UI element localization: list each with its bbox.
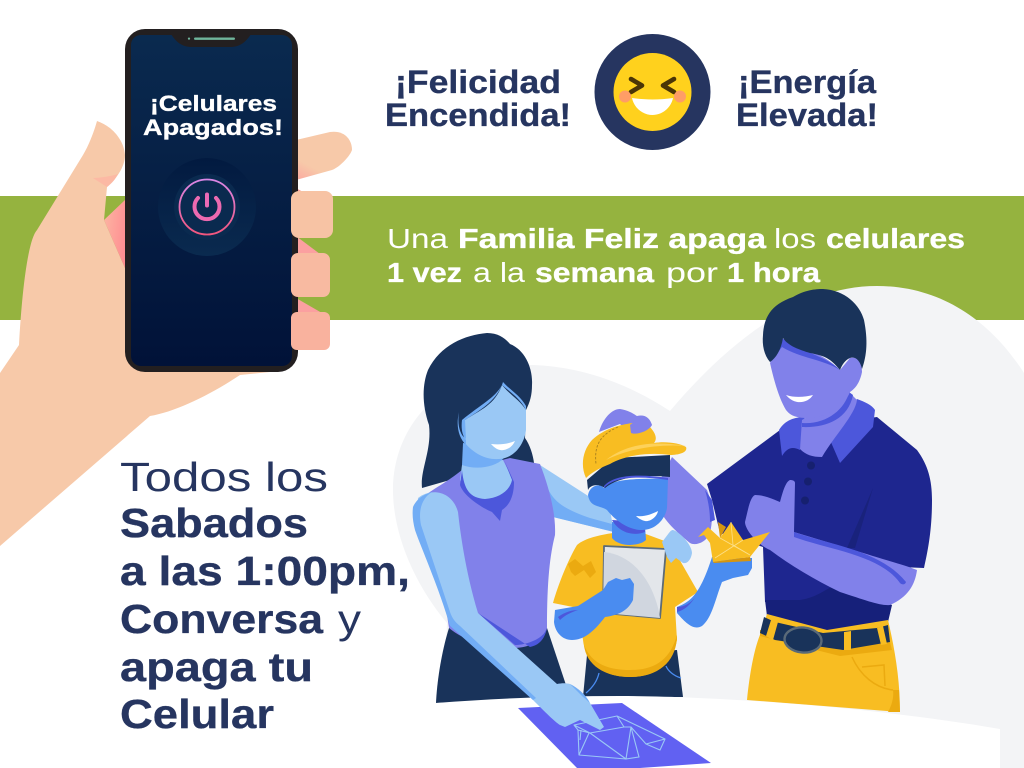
face edge [604,476,668,488]
face [464,385,526,459]
belt buckle [783,626,823,654]
polo shirt [707,417,932,605]
hair edge [458,382,526,445]
heading left: ¡Felicidad [395,64,561,100]
band text: 1 hora [727,257,820,288]
band text [387,223,965,288]
band text: celulares [826,223,965,254]
hair shade [770,338,840,370]
band text: semana [535,257,654,288]
top finger [296,132,352,180]
yellow shirt [553,533,698,677]
pants shadow [760,630,900,712]
phone [125,29,298,372]
heading right [736,64,878,133]
hand on cap fingers [630,420,652,434]
band text: 1 vez [387,257,462,288]
right arm and hand [677,557,752,627]
thumb shadow [93,174,118,187]
green band [0,196,1024,320]
face [588,479,668,530]
hair [422,333,534,488]
collar [779,399,875,463]
neck [800,392,857,457]
sleeve shade [705,490,715,522]
neck [460,460,513,500]
phone message [143,91,283,140]
palm and arm [0,121,270,546]
neck shadow [462,443,504,468]
schedule text: Celular [120,691,274,737]
band text: por [666,257,718,288]
heading right: ¡Energía [738,64,876,100]
shirt hem shade [765,585,892,631]
father's hand on cap [599,409,652,433]
mouth [786,395,813,402]
schedule text: y [338,596,362,642]
schedule text [120,454,410,737]
mouth [636,511,658,521]
band text: a la [473,257,525,288]
band text: Una [387,223,448,254]
fingertips over phone [291,191,333,350]
arm and hand [416,492,604,730]
schedule text: Conversa [120,596,324,642]
hair [763,289,866,370]
blueprint sheet [518,703,711,768]
phone message: ¡Celulares [150,91,277,116]
palm shadow [104,200,125,268]
shirt fold and buttons [847,488,873,548]
pants [747,614,900,712]
child [553,409,752,697]
vest shade [449,590,547,655]
pocket lines [586,666,681,693]
phone message: Apagados! [143,115,283,140]
hair band [587,455,670,490]
schedule text: Sabados [120,500,308,546]
finger shadows [296,188,322,313]
hand holding phone [0,121,352,546]
power button [158,158,256,256]
speaker [188,38,235,40]
icon: laughing emoji [594,34,710,150]
vest [413,458,555,648]
phone body [125,29,298,372]
shirt hem shade [584,635,677,677]
back arm edge [540,465,614,532]
top hand [662,530,692,563]
origami crane [698,522,770,563]
cap [583,423,686,478]
belt [760,617,890,650]
face [770,338,862,418]
cap visor light [606,444,686,460]
finger edge [570,684,590,703]
mouth [491,441,515,450]
woman [413,333,614,703]
gray background blob [393,286,1024,768]
tablet [603,546,666,618]
neck shade [802,392,853,427]
cap stitching [596,427,618,464]
screen [131,35,292,366]
neck shadow [612,520,645,534]
notch [171,34,251,47]
arm shade [558,596,696,620]
schedule text: apaga tu [120,644,313,690]
origami drawing [574,716,665,759]
neckline [460,460,514,521]
band text: Familia Feliz apaga [458,223,767,254]
shirt logo [568,559,596,578]
back arm [540,465,614,532]
schedule text: a las 1:00pm, [120,548,410,594]
heading right: Elevada! [736,97,878,133]
front arm and thumbs up [745,480,917,605]
neck [612,522,646,545]
white table [400,696,1000,768]
arm shade [794,532,906,584]
heading left [385,64,571,133]
pants [583,650,683,697]
pocket [852,657,893,690]
schedule text: Todos los [120,454,328,500]
band text: los [774,223,816,254]
left arm and hand [554,578,634,640]
arm edge [413,492,536,700]
man [660,289,932,712]
woman's pointing arm [413,492,604,730]
heading left: Encendida! [385,97,571,133]
upper arm over child [660,457,712,544]
pants [436,628,570,703]
